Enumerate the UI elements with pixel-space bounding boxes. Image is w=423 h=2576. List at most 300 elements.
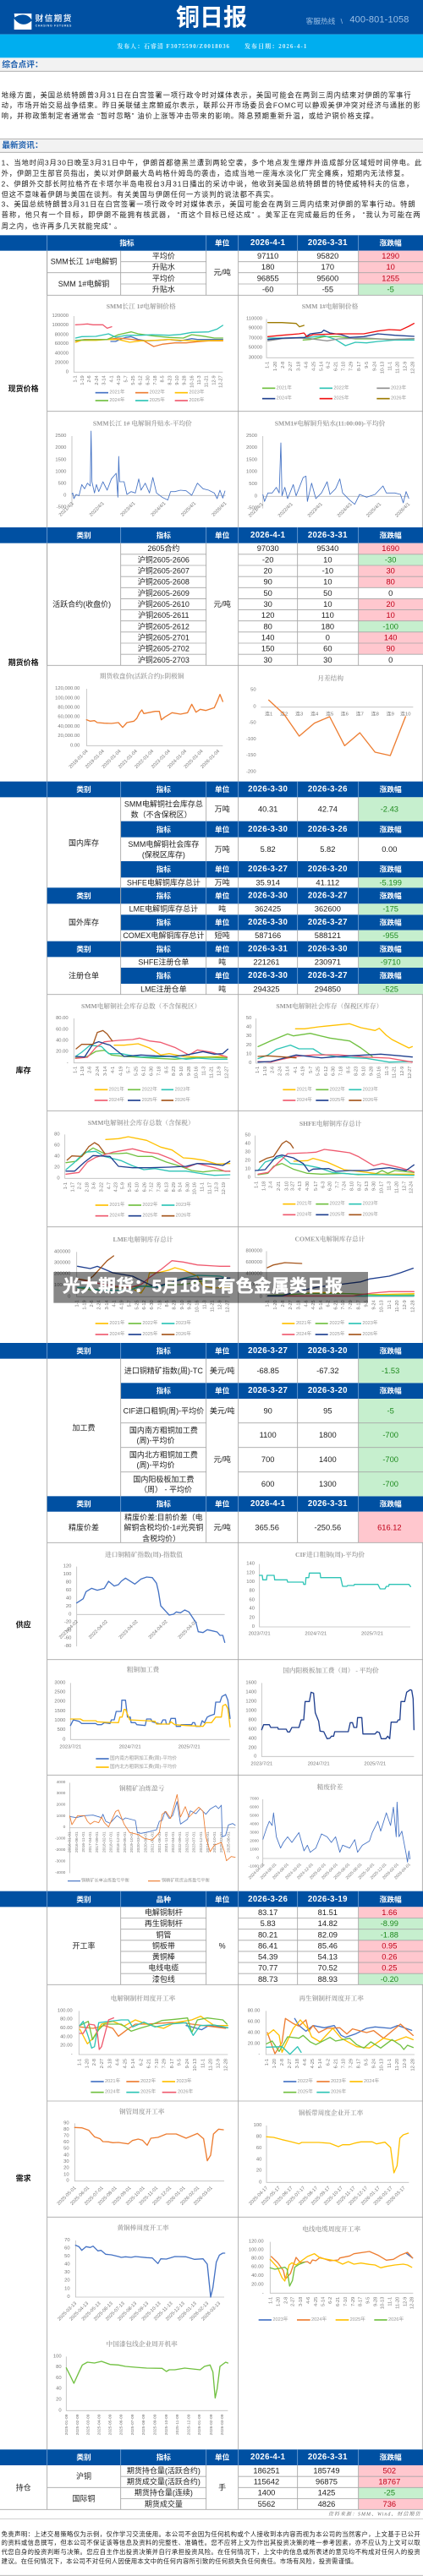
chart: 中国漆包线企业周开机率: 2025-11-09: [175, 2414, 180, 2435]
chart: SMM社会库存总数含保税: 4-7: [107, 1182, 112, 1189]
chart: 中国漆包线企业周开机率: 2025-08-09: [141, 2414, 146, 2435]
chart: LME电解铜库存总计: 2023年: [176, 1319, 191, 1326]
chart: SMM 1#电解铜价格: 5-14: [320, 362, 325, 371]
chart: 中国漆包线企业周开机率: 2026-03-09: [220, 2414, 225, 2435]
chart: 黄铜棒周度开工率: 2025-11-13: [153, 2301, 173, 2322]
chart: 电解铜制杆周度开工率: 100.00: [58, 2008, 73, 2013]
table header row: 指标: [157, 530, 171, 539]
chart: LME电解铜库存总计: 11-21: [211, 1300, 216, 1312]
chart: 月差结构: 连5: [326, 711, 333, 718]
chart: 铜精矿冶炼盈亏: 2023-12-01: [199, 1831, 204, 1853]
table: open interest: 期货成交量(活跃合约): [127, 2477, 201, 2486]
table: open interest: 期货持仓量(活跃合约): [127, 2465, 201, 2475]
chart grid frames: [47, 251, 423, 2509]
table: futures prices: 60: [323, 645, 332, 653]
chart: 粗铜加工费: 2023/7/21: [59, 1745, 81, 1750]
chart: SMM社会库存总数不含保税区: -: [67, 1061, 69, 1066]
chart: SMM社会库存保税区: 50: [246, 1016, 252, 1021]
chart: 电线电缆周度开工率: 20.00: [251, 2282, 264, 2287]
table: futures prices: 沪铜2605-2611: [138, 610, 190, 619]
table: inventory: 万吨: [215, 877, 230, 887]
hotline: 400-801-1058: [349, 15, 409, 25]
chart: 铜精矿冶炼盈亏: 2016-01-01: [68, 1831, 73, 1853]
chart: CIF进口粗铜: 120: [246, 1570, 255, 1575]
chart: LME电解铜库存总计: 2026年: [176, 1330, 191, 1337]
table: spot prices: 升贴水: [152, 262, 175, 271]
chart: 再生铜制杆周度开工率: 2022年: [298, 2077, 313, 2084]
chart: SMM 1#电解铜价格: 2023年: [391, 384, 407, 390]
chart: SHFE电解铜库存总计: 4-13: [298, 1182, 303, 1191]
chart: 再生铜制杆周度开工率: 11-1: [387, 2059, 393, 2068]
table: inventory: SHFE电解铜库存总计: [127, 877, 201, 887]
chart: SMM长江1#电解铜价格: SMM长江 1#电解铜价格: [107, 302, 176, 310]
table: operating rates: 再生铜制杆: [145, 1918, 183, 1928]
chart: SMM社会库存保税区: 9-28: [369, 1067, 374, 1076]
chart: 电解铜制杆周度开工率: 2-8: [92, 2059, 97, 2066]
chart: SHFE电解铜库存总计: 2024年: [297, 1210, 312, 1217]
chart: COMEX电解铜库存总计: 2026年: [362, 1330, 378, 1337]
chart: 精废价差: 2025-04-01: [321, 1862, 339, 1880]
table: processing fees and scrap spread: -700: [382, 1431, 398, 1439]
table: processing fees and scrap spread: -250.56: [315, 1523, 341, 1531]
table: open interest: 4826: [318, 2500, 335, 2508]
chart: SMM长江1#电解铜价格: 2021年: [109, 389, 125, 396]
table header row: 2026-3-26: [248, 1895, 288, 1904]
chart: CIF进口粗铜: 2023/7/21: [249, 1631, 271, 1636]
table: spot prices: 升贴水: [152, 285, 175, 294]
chart: 铜精矿冶炼盈亏: 2021-01-01: [151, 1831, 156, 1853]
chart: SMM社会库存保税区: [246, 1001, 413, 1103]
chart: 进口铜精矿指数: -20: [64, 1620, 72, 1625]
table: futures prices: 140: [261, 634, 274, 642]
chart: 期货收盘价: 2020-01-04: [102, 749, 122, 770]
table: processing fees and scrap spread: 1800: [319, 1431, 337, 1439]
chart: LME电解铜库存总计: 2025年: [142, 1330, 158, 1337]
chart: 再生铜制杆周度开工率: 11-20: [395, 2059, 400, 2071]
chart: SMM1#电解铜升贴水: [246, 419, 411, 519]
chart: 再生铜制杆周度开工率: 2-8: [280, 2059, 285, 2066]
table: futures prices: 80: [386, 578, 395, 587]
category label: 库存: 库存: [16, 1066, 31, 1075]
table header rows: 单位: [215, 1386, 230, 1395]
text block: commentary: [2, 90, 420, 120]
chart: 再生铜制杆周度开工率: 2025年: [298, 2088, 313, 2095]
table: open interest: 115642: [254, 2478, 279, 2486]
chart: SHFE电解铜库存总计: 2-21: [277, 1182, 282, 1191]
chart: 期货收盘价: 2022-01-04: [134, 749, 155, 770]
table: inventory: 41.112: [316, 878, 339, 887]
chart: 铜管周度开工率: 2025-06-01: [69, 2186, 91, 2207]
chart: 电线电缆周度开工率: 1-20: [276, 2297, 281, 2306]
table header row: 品种: [157, 1894, 171, 1903]
chart: 国内阳极板加工费: 1400: [245, 1689, 257, 1695]
table: inventory: 万吨: [215, 844, 230, 854]
chart: SMM社会库存总数不含保税区: 4-19: [118, 1067, 124, 1076]
table header row: 涨跌幅: [380, 1894, 402, 1903]
chart: CIF进口粗铜: 0: [252, 1624, 255, 1629]
chart: 再生铜制杆周度开工率: 2-27: [288, 2059, 293, 2068]
chart: 再生铜制杆周度开工率: 2023年: [331, 2077, 347, 2084]
chart: SMM社会库存总数含保税: 2021年: [109, 1201, 125, 1208]
table: inventory: LME电解铜库存总计: [129, 904, 198, 914]
chart: 铜精矿冶炼盈亏: 2024-05-01: [206, 1831, 211, 1853]
chart: 黄铜棒周度开工率: 30: [64, 2270, 70, 2275]
table: operating rates: 85.46: [318, 1941, 338, 1950]
table: open interest: -25: [384, 2489, 395, 2497]
chart: SMM社会库存总数不含保税区: [56, 1001, 229, 1103]
table header rows: 2026-3-27: [308, 891, 348, 901]
chart: SMM社会库存总数含保税: SMM电解铜社会库存总数（含保税）: [88, 1118, 195, 1127]
table: spot prices: 95600: [316, 274, 338, 282]
chart: 黄铜棒周度开工率: 60: [64, 2246, 70, 2251]
chart: 中国漆包线企业周开机率: 2026-01-09: [197, 2414, 202, 2435]
chart: 月差结构: 连9: [387, 711, 394, 718]
chart: 粗铜加工费: 2000: [54, 1700, 66, 1705]
chart: 再生铜制杆周度开工率: 2026年: [331, 2088, 347, 2095]
chart: 国内阳极板加工费: 国内阳极板加工费（周） - 平均价: [283, 1666, 379, 1674]
chart: SHFE电解铜库存总计: 2022年: [330, 1200, 345, 1207]
chart: 月差结构: 50: [250, 688, 256, 693]
table header rows: 指标: [157, 944, 171, 953]
chart: SMM 1#电解铜价格: 50000: [249, 346, 263, 351]
table: processing fees and scrap spread: 90: [263, 1406, 272, 1415]
text block: commentary: 地缘方面，美国总统特朗普3月31日在白宫签署一项行政令时对媒体表示，美国可能会在两到三周内结束对伊朗的军事行: [2, 90, 411, 99]
chart: SHFE电解铜库存总计: 9-13: [365, 1182, 370, 1191]
table: operating rates: 70.52: [318, 1964, 338, 1973]
chart: 铜精矿冶炼盈亏: 铜精矿冶炼盈亏: [119, 1783, 165, 1792]
chart: SMM社会库存总数不含保税区: 80.00: [56, 1016, 69, 1021]
table: futures prices: 沪铜2605-2703: [138, 655, 190, 664]
chart: COMEX电解铜库存总计: 5-14: [319, 1300, 324, 1310]
chart: SMM 1#电解铜价格: 2-27: [288, 362, 294, 371]
table: inventory: (保税区库存): [142, 849, 185, 859]
chart: SMM1#电解铜升贴水: 2026/4/1: [394, 502, 411, 519]
table header row: [0, 235, 423, 251]
table: operating rates: 开工率: [72, 1941, 96, 1951]
chart: 再生铜制杆周度开工率: 4-25: [310, 2059, 316, 2068]
chart: SMM社会库存保税区: 30: [246, 1034, 252, 1039]
chart: 电解铜制杆周度开工率: 7-29: [162, 2059, 168, 2068]
chart: LME电解铜库存总计: 2-6: [90, 1300, 95, 1307]
publisher band: 发布日期：2026-4-1: [244, 42, 307, 50]
chart: 中国漆包线企业周开机率: 20: [56, 2398, 62, 2403]
chart: 铜管周度开工率: 50: [63, 2147, 69, 2152]
chart: 电解铜制杆周度开工率: 11-20: [208, 2059, 213, 2071]
chart: 国内阳极板加工费: 0: [254, 1754, 257, 1759]
table: processing fees and scrap spread: CIF进口粗铜(周)-平均价: [124, 1405, 204, 1415]
chart: SMM1#电解铜升贴水: 500: [249, 482, 258, 487]
chart: 进口铜精矿指数: 20: [66, 1604, 72, 1609]
chart: SMM社会库存总数含保税: [54, 1118, 230, 1219]
chart: LME电解铜库存总计: 6-30: [150, 1300, 155, 1310]
table: inventory: 国外库存: [69, 918, 99, 927]
table: open interest: 手: [218, 2482, 226, 2491]
chart: SMM社会库存总数不含保税区: 2025年: [142, 1096, 157, 1103]
chart: 电线电缆周度开工率: 5-14: [321, 2297, 327, 2306]
chart: 电解铜制杆周度开工率: [58, 1994, 228, 2095]
watermark banner: 光大期货：5月18日有色金属类日报: [63, 1276, 343, 1296]
chart: 铜精矿冶炼盈亏: -1000: [55, 1836, 66, 1841]
table: futures prices: -100: [382, 622, 398, 630]
chart: 中国漆包线企业周开机率: 2025-05-09: [108, 2414, 113, 2435]
chart: 中国漆包线企业周开机率: 2025-06-09: [118, 2414, 124, 2435]
chart: SMM社会库存总数含保税: 7-12: [149, 1182, 154, 1192]
table: spot prices: SMM 1#电解铜: [58, 279, 109, 288]
chart: 进口铜精矿指数: 40: [66, 1596, 72, 1601]
chart: CIF进口粗铜: 60: [250, 1597, 255, 1602]
table header rows: 单位: [215, 1499, 230, 1509]
chart: 精废价差: 2025-10-01: [357, 1862, 376, 1880]
chart: 精废价差: 2024-04-01: [248, 1862, 266, 1880]
chart: SMM社会库存总数含保税: 9-30: [186, 1182, 191, 1192]
table: operating rates: 88.73: [258, 1975, 277, 1984]
chart: CIF进口粗铜: 100: [246, 1580, 255, 1585]
chart: 电线电缆周度开工率: [249, 2224, 415, 2322]
chart: 粗铜加工费: 国内南方粗铜加工费(周)-平均价: [110, 1755, 178, 1761]
table: processing fees and scrap spread: 616.12: [377, 1523, 402, 1531]
chart: SMM社会库存总数含保税: 2-2: [77, 1182, 82, 1189]
chart: SMM 1#电解铜价格: 4-25: [312, 362, 317, 371]
chart: SHFE电解铜库存总计: 30: [245, 1149, 251, 1154]
chart: SMM长江1#电解铜升贴水: 2024/4/1: [151, 501, 167, 518]
table: inventory: 万吨: [215, 805, 230, 814]
chart: 期货收盘价: [55, 671, 222, 770]
table: futures prices: 10: [323, 600, 332, 609]
chart: 电线电缆周度开工率: 2026年: [388, 2316, 404, 2322]
table: inventory: 230971: [315, 958, 341, 967]
chart: 精废价差: 3000: [250, 1831, 259, 1836]
hotline: 客服热线: [306, 16, 336, 25]
chart: 电解铜制杆周度开工率: 1-20: [85, 2059, 90, 2068]
chart: LME电解铜库存总计: 9-10: [180, 1300, 185, 1310]
chart: LME电解铜库存总计: 12-27: [225, 1300, 230, 1313]
chart: 进口铜精矿指数: -40: [64, 1628, 72, 1633]
chart: SMM社会库存总数含保税: 0: [57, 1176, 60, 1181]
chart: SMM社会库存总数含保税: 40: [54, 1154, 60, 1159]
chart: SMM社会库存总数含保税: 8-29: [172, 1182, 177, 1192]
chart: 再生铜制杆周度开工率: 再生铜制杆周度开工率: [299, 1994, 364, 2002]
chart: 电解铜制杆周度开工率: 12-28: [223, 2059, 228, 2071]
chart: 精废价差: 7000: [250, 1797, 259, 1802]
table header rows: 涨跌幅: [380, 824, 402, 833]
table: operating rates: 0.95: [382, 1941, 397, 1950]
chart: SMM社会库存总数含保税: 8-13: [164, 1182, 169, 1192]
chart: SMM长江1#电解铜价格: 8-23: [168, 375, 173, 385]
chart: SMM社会库存总数含保税: 11-1: [200, 1182, 205, 1192]
table: futures prices: 180: [321, 622, 334, 630]
chart: 国内阳极板加工费: 200: [249, 1745, 257, 1750]
chart: 铜管周度开工率: 2025-12-01: [151, 2186, 173, 2207]
chart: SHFE电解铜库存总计: 6-20: [328, 1182, 333, 1191]
chart: LME电解铜库存总计: 2024年: [109, 1330, 125, 1337]
table: inventory: -175: [382, 905, 398, 914]
table header rows: 类别: [76, 944, 91, 953]
chart: SMM长江1#电解铜价格: 2023年: [189, 389, 205, 396]
table: open interest: 期货持仓量(连续): [135, 2488, 193, 2497]
chart: SMM社会库存总数不含保税区: 2021年: [109, 1085, 124, 1092]
chart: SMM社会库存保税区: 11-3: [385, 1067, 390, 1076]
chart: COMEX电解铜库存总计: 8-17: [356, 1300, 361, 1310]
chart: 黄铜棒周度开工率: 2025-06-13: [93, 2301, 114, 2322]
chart: SMM社会库存总数不含保税区: 11-3: [202, 1067, 207, 1076]
table header rows: 类别: [76, 891, 91, 900]
chart: SMM社会库存总数不含保税区: 2-24: [96, 1067, 101, 1076]
chart: SMM长江1#电解铜价格: 100000: [52, 323, 69, 328]
table: inventory: 40.31: [258, 805, 277, 814]
chart: 再生铜制杆周度开工率: 7-10: [341, 2059, 346, 2068]
table: inventory: 吨: [218, 958, 226, 967]
chart: 再生铜制杆周度开工率: 12-9: [403, 2059, 408, 2068]
table: open interest: 736: [383, 2500, 396, 2508]
chart: 电解铜制杆周度开工率: 3-18: [107, 2059, 113, 2068]
chart: 进口铜精矿指数: 2024-04-02: [148, 1619, 168, 1640]
table header rows: 2026-3-30: [248, 825, 288, 834]
chart: 再生铜制杆周度开工率: 6-2: [326, 2059, 331, 2066]
chart: 国内阳极板加工费: 2024/7/21: [308, 1762, 330, 1767]
chart: 铜管周度开工率: 20: [63, 2166, 69, 2171]
chart: SMM长江1#电解铜价格: 1-19: [80, 375, 85, 385]
table header rows: 单位: [215, 1345, 230, 1355]
table header rows: 涨跌幅: [380, 1386, 402, 1395]
chart: SMM长江1#电解铜升贴水: 2021/4/1: [58, 501, 75, 518]
chart: SMM社会库存保税区: 11-21: [393, 1067, 398, 1078]
chart: 铜板带周度企业开工率: 2026-01-17: [360, 2186, 382, 2207]
chart: 铜板带周度企业开工率: 2025-10-17: [323, 2186, 344, 2207]
table header rows: 2026-3-20: [308, 865, 348, 874]
table header rows: 单位: [215, 784, 230, 794]
table: inventory: -525: [382, 985, 398, 993]
table: futures prices: 90: [263, 578, 272, 587]
table: futures prices: 沪铜2605-2607: [138, 566, 190, 575]
chart: SMM社会库存总数不含保税区: 3-14: [103, 1067, 108, 1076]
table header row: 单位: [215, 2453, 230, 2462]
chart: SHFE电解铜库存总计: 20: [245, 1158, 251, 1163]
chart: SMM长江1#电解铜价格: 1-1: [73, 375, 78, 383]
table: operating rates: -1.88: [381, 1930, 398, 1939]
chart: SMM1#电解铜升贴水: -500: [247, 506, 258, 511]
chart: SMM长江1#电解铜价格: 11-21: [204, 375, 209, 387]
table: inventory: SHFE注册仓单: [138, 958, 189, 967]
chart: SMM社会库存总数不含保税区: 10-16: [195, 1067, 200, 1078]
chart: COMEX电解铜库存总计: 11-20: [395, 1300, 400, 1312]
chart: 进口铜精矿指数: 80: [66, 1580, 72, 1585]
chart: COMEX电解铜库存总计: 4-6: [304, 1300, 309, 1307]
chart: 进口铜精矿指数: -60: [64, 1636, 72, 1641]
chart: SMM1#电解铜升贴水: 2023/4/1: [307, 502, 324, 519]
table: processing fees and scrap spread: 美元/吨: [210, 1366, 234, 1375]
table: futures prices: 2605合约: [147, 543, 179, 553]
chart: SMM 1#电解铜价格: 2-8: [281, 362, 286, 368]
chart: SMM 1#电解铜价格: 11-1: [388, 362, 393, 371]
chart: 月差结构: [246, 674, 413, 774]
chart: 电线电缆周度开工率: 2-27: [291, 2297, 296, 2306]
chart: SMM1#电解铜升贴水: 2022/4/1: [277, 502, 294, 519]
chart: 精废价差: 2025-08-01: [345, 1862, 364, 1880]
table: open interest: 502: [383, 2466, 396, 2475]
chart: 电解铜制杆周度开工率: 2025年: [140, 2088, 157, 2095]
chart: 黄铜棒周度开工率: 2025-08-13: [117, 2301, 138, 2322]
table: inventory: 587166: [255, 931, 281, 940]
table header rows: 2026-3-20: [308, 1386, 348, 1395]
chart: SMM 1#电解铜价格: 9-24: [372, 362, 377, 371]
chart: 再生铜制杆周度开工率: 1-20: [272, 2059, 277, 2068]
chart: 铜精矿冶炼盈亏: 3000: [57, 1791, 66, 1796]
chart: 中国漆包线企业周开机率: 100: [53, 2354, 62, 2359]
chart: 铜板带周度企业开工率: 2026-02-17: [373, 2186, 393, 2207]
chart: CIF进口粗铜: [246, 1550, 410, 1636]
table: operating rates: 88.93: [318, 1975, 338, 1984]
chart: SMM社会库存总数含保税: 3-6: [92, 1182, 97, 1189]
chart: 铜精矿冶炼盈亏: 1000: [57, 1814, 66, 1819]
table: open interest: 期货成交量: [145, 2499, 183, 2508]
chart: SHFE电解铜库存总计: 2026年: [363, 1210, 378, 1217]
chart: 铜板带周度企业开工率: 2025-11-17: [336, 2186, 356, 2207]
table: futures prices: 50: [323, 589, 332, 598]
table: inventory: -955: [382, 931, 398, 940]
chart: 铜板带周度企业开工率: 2026-03-17: [386, 2186, 406, 2207]
table header rows: 类别: [76, 1499, 91, 1509]
chart: 黄铜棒周度开工率: 20: [64, 2279, 70, 2284]
text block: news: 2、伊朗外交部长阿拉格齐在卡塔尔半岛电视台3月31日播出的采访中说，他收到美国总统特朗普的特使威特科夫的信息，: [2, 179, 413, 188]
chart: 电解铜制杆周度开工率: 5-14: [131, 2059, 136, 2068]
chart: SMM社会库存总数不含保税区: 7-18: [157, 1067, 162, 1076]
chart: 国内阳极板加工费: 400: [249, 1736, 257, 1741]
chart: COMEX电解铜库存总计: 2025年: [329, 1330, 345, 1337]
chart: 黄铜棒周度开工率: 70: [64, 2238, 70, 2243]
chart: SMM社会库存总数含保税: 2025年: [142, 1212, 158, 1219]
chart: 进口铜精矿指数: 2022-04-02: [88, 1619, 109, 1640]
chart: SMM社会库存总数含保税: 3-22: [100, 1182, 105, 1192]
chart: 铜管周度开工率: 10: [63, 2172, 69, 2177]
chart: SMM社会库存总数含保税: 2023年: [176, 1201, 191, 1208]
chart: 铜管周度开工率: 铜管周度开工率: [119, 2107, 165, 2115]
table: open interest: 96875: [316, 2478, 338, 2486]
chart: SHFE电解铜库存总计: [245, 1119, 415, 1217]
chart: 电线电缆周度开工率: 2-8: [283, 2297, 288, 2304]
chart: 铜精矿冶炼盈亏: [55, 1780, 235, 1884]
chart: SMM社会库存保税区: 1-1: [255, 1067, 261, 1073]
chart: SMM社会库存保税区: 10-16: [377, 1067, 382, 1078]
chart: SMM长江1#电解铜价格: 20000: [55, 360, 69, 365]
chart: SMM社会库存总数含保税: 9-14: [178, 1182, 183, 1192]
chart: SHFE电解铜库存总计: 40: [245, 1141, 251, 1146]
table: spot prices: 平均价: [152, 273, 175, 282]
chart: SMM长江1#电解铜升贴水: -500: [57, 505, 67, 510]
chart: SHFE电解铜库存总计: 8-10: [350, 1182, 355, 1191]
category label: 期货价格: 期货价格: [8, 658, 39, 667]
chart: SMM 1#电解铜价格: 2021年: [277, 384, 292, 390]
table: inventory: -5.199: [379, 878, 402, 887]
table: processing fees and scrap spread: (周)-平均价: [137, 1436, 174, 1445]
icon: company logo: [14, 14, 31, 30]
chart: 国内阳极板加工费: 1000: [245, 1708, 257, 1713]
chart: COMEX电解铜库存总计: 9-24: [372, 1300, 377, 1310]
chart: CIF进口粗铜: 20: [250, 1615, 255, 1620]
table: processing fees and scrap spread: (周)-平均价: [137, 1460, 174, 1470]
chart: 月差结构: 连2: [280, 711, 288, 718]
chart: 期货收盘价: 2023-01-04: [151, 749, 172, 770]
table: open interest: [0, 2449, 423, 2509]
chart: COMEX电解铜库存总计: 2-8: [281, 1300, 286, 1307]
chart: SHFE电解铜库存总计: 9-30: [372, 1182, 377, 1191]
chart: SMM长江1#电解铜升贴水: 2022/4/1: [89, 501, 106, 518]
chart: SMM 1#电解铜价格: [246, 302, 415, 401]
chart: 期货收盘价: 2024-01-04: [167, 749, 188, 770]
chart: 电线电缆周度开工率: 2024年: [311, 2316, 327, 2322]
chart: LME电解铜库存总计: 5-25: [135, 1300, 140, 1310]
table header row: 2026-3-31: [308, 238, 348, 248]
chart: COMEX电解铜库存总计: 9-5: [364, 1300, 369, 1307]
